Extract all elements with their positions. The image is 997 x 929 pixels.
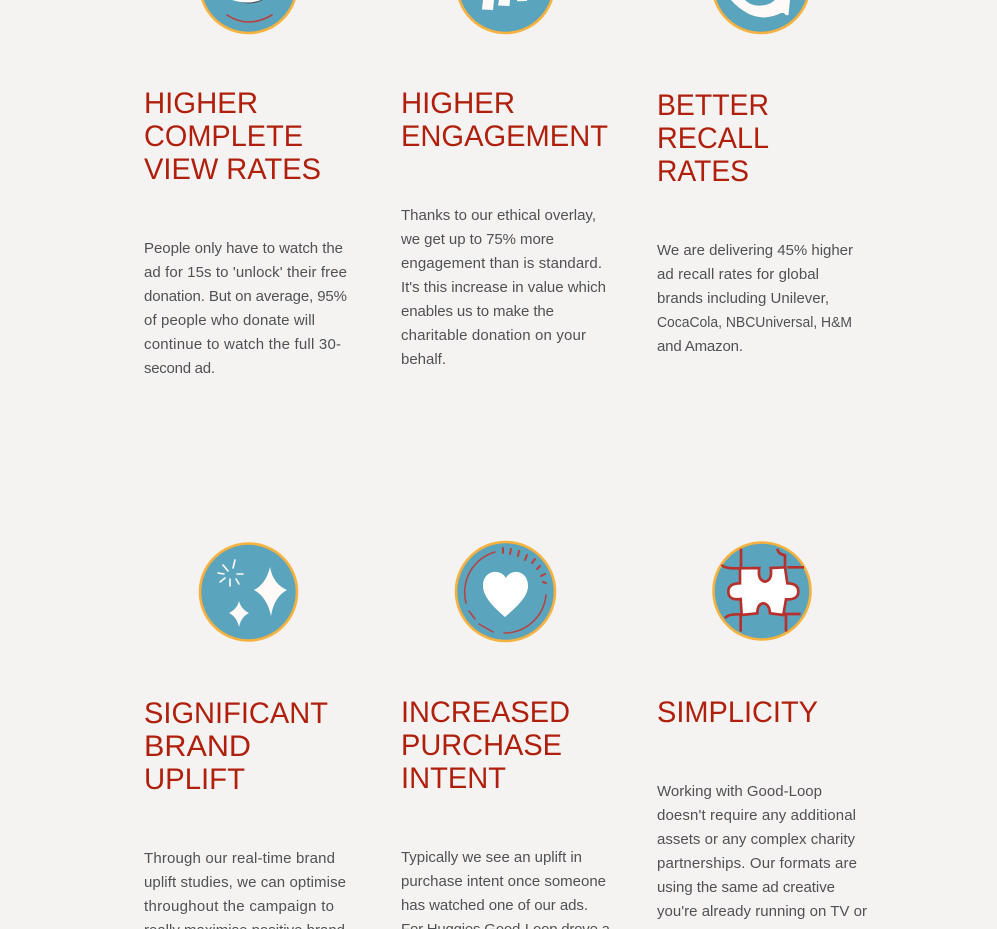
heading: INTENT <box>401 762 506 795</box>
body text: uplift studies, we can optimise <box>144 874 346 891</box>
body text <box>657 242 853 355</box>
body text: second ad. <box>144 360 215 377</box>
heading <box>401 87 608 153</box>
body text: continue to watch the full 30- <box>144 336 341 353</box>
body text: ad recall rates for global <box>657 266 819 283</box>
body text <box>144 850 346 929</box>
heading <box>657 89 769 188</box>
icon: puzzle <box>714 542 810 640</box>
body text: Working with Good-Loop <box>657 783 822 800</box>
body text: has watched one of our ads. <box>401 897 588 914</box>
heading: ENGAGEMENT <box>401 120 608 153</box>
heading: PURCHASE <box>401 729 562 762</box>
body text: charitable donation on your <box>401 327 586 344</box>
body text: partnerships. Our formats are <box>657 855 857 872</box>
body text: of people who donate will <box>144 312 315 329</box>
heading: RATES <box>657 155 749 188</box>
heading: VIEW RATES <box>144 153 321 186</box>
body text <box>657 783 867 929</box>
body text <box>400 207 606 368</box>
body text: you're already running on TV or <box>657 903 867 920</box>
body text: using the same ad creative <box>657 879 835 896</box>
body text: behalf. <box>401 351 446 368</box>
body text: Typically we see an uplift in <box>401 849 582 866</box>
body text: we get up to 75% more <box>400 231 554 248</box>
icon: bars badge (cropped) <box>457 0 554 33</box>
panel: simplicity <box>657 542 867 929</box>
panel: higher complete view rates <box>144 0 347 377</box>
icon: recall arrow badge (cropped) <box>712 0 810 33</box>
body text: brands including Unilever, <box>657 290 829 307</box>
body text: enables us to make the <box>401 303 554 320</box>
body text: assets or any complex charity <box>657 831 856 848</box>
heading: RECALL <box>657 122 769 155</box>
heading <box>144 697 328 796</box>
heading: HIGHER <box>144 87 258 120</box>
panel: increased purchase intent <box>401 542 611 929</box>
heading: COMPLETE <box>144 120 303 153</box>
heading <box>144 87 321 186</box>
body text: It's this increase in value which <box>401 279 606 296</box>
body text: Through our real-time brand <box>144 850 335 867</box>
heading: BRAND <box>144 730 251 763</box>
body text: Thanks to our ethical overlay, <box>401 207 596 224</box>
panel: better recall rates <box>657 0 853 355</box>
heading: SIMPLICITY <box>657 696 818 729</box>
heading: BETTER <box>657 89 769 122</box>
icon: sparkles <box>200 544 297 640</box>
body text: and Amazon. <box>657 338 743 355</box>
body text: We are delivering 45% higher <box>657 242 853 259</box>
body text: purchase intent once someone <box>401 873 606 890</box>
heading: INCREASED <box>401 696 570 729</box>
heading: UPLIFT <box>144 763 245 796</box>
panel: significant brand uplift <box>144 544 346 929</box>
body text: People only have to watch the <box>144 240 343 257</box>
body text <box>401 849 611 929</box>
heading: SIGNIFICANT <box>144 697 328 730</box>
heading: HIGHER <box>401 87 515 120</box>
body text: CocaCola, NBCUniversal, H&M <box>657 314 852 331</box>
body text: doesn't require any additional <box>657 807 856 824</box>
panel: higher engagement <box>400 0 608 368</box>
heading <box>401 696 570 795</box>
body text: ad for 15s to 'unlock' their free <box>144 264 347 281</box>
body text: donation. But on average, 95% <box>144 288 347 305</box>
body text: throughout the campaign to <box>144 898 334 915</box>
icon: play badge (cropped) <box>200 0 297 33</box>
body text <box>144 240 347 377</box>
body text: engagement than is standard. <box>401 255 602 272</box>
icon: heart <box>456 542 555 641</box>
